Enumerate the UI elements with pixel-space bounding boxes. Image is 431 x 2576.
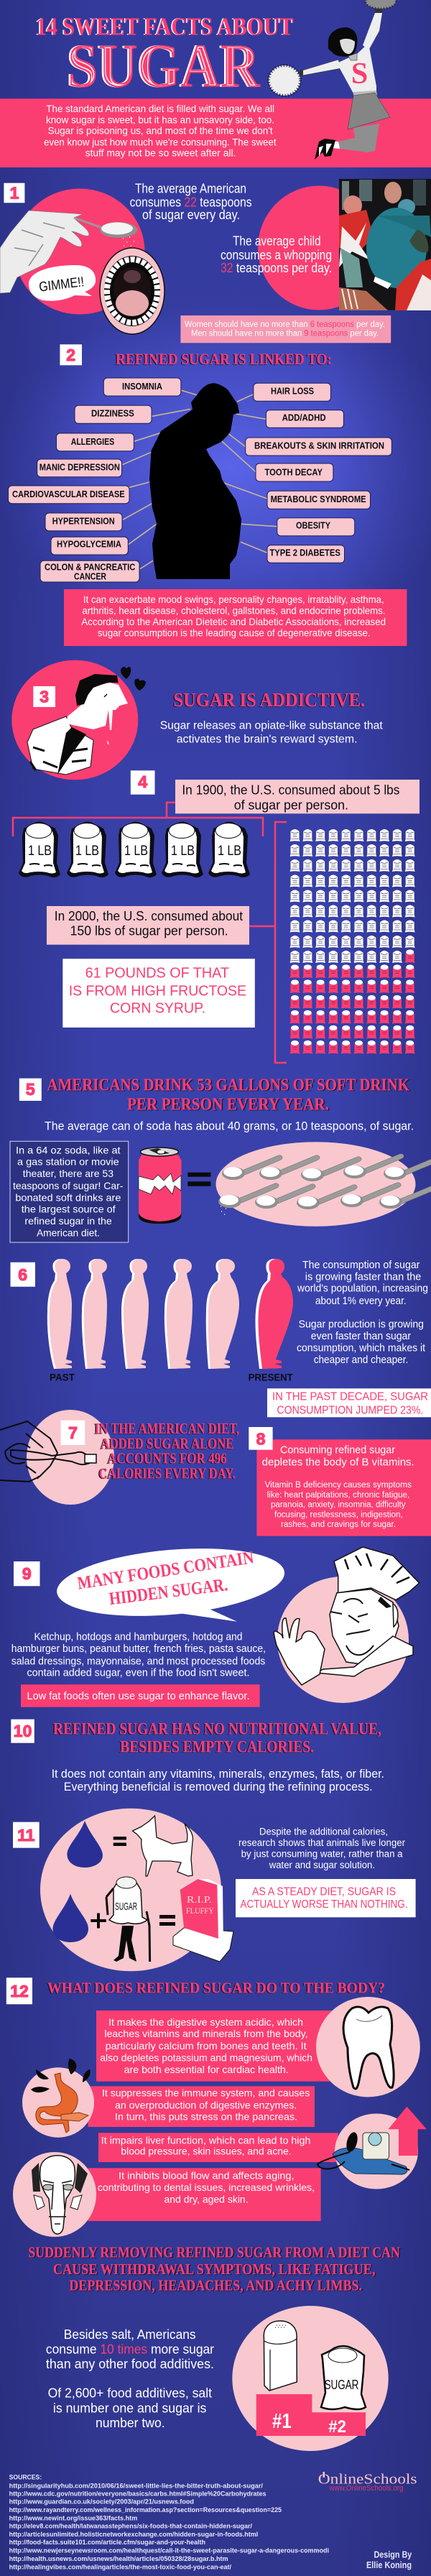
label: hypoglycemia	[51, 537, 128, 555]
text: rashes, and cravings for sugar.	[281, 1520, 396, 1529]
badge 8: 8	[256, 1430, 266, 1449]
heading	[53, 1719, 381, 1755]
icon: soda can	[139, 1148, 182, 1224]
equals sign	[187, 1173, 210, 1186]
speech bubble: hidden sugar: HIDDEN SUGAR.	[108, 1575, 228, 1609]
panel: fact 3	[11, 660, 383, 780]
icon: cheerleader: S	[351, 57, 368, 91]
icon: stomach	[22, 2059, 94, 2138]
text: The average can of soda has about 40 grams, or 10 teaspoons, of sugar.	[45, 1119, 414, 1132]
podium	[256, 2394, 366, 2437]
icon: walking sugar bag	[106, 1877, 150, 1962]
five large sugar bags: 1 LB	[124, 844, 148, 859]
callout: degenerative disease: It can exacerbate mood swings, personality changes, irratablity, asthma,	[83, 594, 384, 605]
block: immune system: It suppresses the immune system, and causes	[102, 2087, 310, 2098]
heading: WHAT DOES REFINED SUGAR DO TO THE BODY?	[47, 1979, 385, 1996]
label: add/adhd: ADD/ADHD	[282, 413, 326, 423]
text: like: heart palpitations, chronic fatigue,	[267, 1491, 409, 1500]
text: average child: The average child	[233, 234, 321, 249]
text	[238, 1826, 405, 1870]
badge 1: 1	[10, 184, 19, 203]
label: cardiovascular disease: CARDIOVASCULAR DISEASE	[12, 489, 125, 499]
callout: low fat	[21, 1684, 260, 1707]
five large sugar bags: 1 LB	[28, 844, 52, 859]
badge 5	[19, 1079, 42, 1101]
text: paranoia, anxiety, insomnia, difficulty	[271, 1501, 406, 1510]
panel: fact 2	[9, 344, 407, 646]
block: blood flow and aging: It inhibits blood flow and affects aging,	[119, 2170, 295, 2182]
badge 1	[4, 183, 24, 203]
callout: daily limits: Men should have no more than 9 teaspoons per day.	[191, 330, 379, 338]
icon: water drop	[53, 1894, 88, 1942]
label: hypertension: HYPERTENSION	[52, 517, 115, 527]
callout: high fructose corn syrup: 61 POUNDS OF THAT	[85, 965, 229, 982]
heading: ACCOUNTS FOR 496	[108, 1450, 227, 1467]
block: immune system	[88, 2086, 315, 2127]
pink box	[256, 1439, 431, 1536]
icon: water drop	[67, 1821, 103, 1868]
callout: daily limits: Women should have no more than 6 teaspoons per day.	[185, 320, 385, 329]
panel: fact 11	[13, 1809, 416, 1971]
block: liver function: blood pressure, skin issues, and acne.	[121, 2145, 292, 2156]
sources: http://www.newint.org/issue363/facts.htm	[9, 2514, 137, 2522]
label: allergies	[56, 433, 134, 451]
block: acidic: particularly calcium from bones and teeth. It	[106, 2040, 307, 2051]
icon: cheerleader	[269, 0, 396, 160]
text: cheaper and cheaper.	[314, 1354, 408, 1366]
badge 6: 6	[18, 1265, 27, 1284]
badge 5: 5	[26, 1080, 35, 1099]
speech bubble: GIMME: GIMME!!	[38, 274, 85, 295]
title	[36, 13, 294, 101]
plus	[91, 1913, 106, 1929]
icon: addicted man	[27, 674, 128, 775]
badge 11	[13, 1822, 40, 1848]
badge 10: 10	[14, 1722, 32, 1740]
label: hypertension	[45, 513, 122, 531]
panel: fact 8	[249, 1427, 431, 1536]
text: activates the brain's reward system.	[177, 733, 358, 745]
badge 12	[6, 1977, 32, 2004]
five large sugar bags: 1 LB	[75, 844, 99, 859]
bracket: 2000	[249, 822, 287, 1063]
text: besides salt: than any other food additives.	[46, 2357, 214, 2371]
text: focusing, restlessness, indigestion,	[274, 1510, 403, 1519]
label: dizziness: DIZZINESS	[91, 408, 134, 418]
callout: 64 oz soda	[10, 1141, 129, 1242]
label: allergies: ALLERGIES	[71, 437, 114, 447]
panel: fact 4	[13, 770, 420, 1063]
callout: daily limits	[180, 315, 391, 343]
block: blood flow and aging: contributing to dental issues, increased wrinkles,	[98, 2182, 315, 2193]
heading: IN THE AMERICAN DIET,	[95, 1420, 239, 1437]
sources: SOURCES:	[9, 2474, 42, 2482]
callout: 64 oz soda: the largest source of	[22, 1204, 116, 1215]
label: add/adhd	[266, 410, 343, 428]
badge 7	[61, 1421, 85, 1445]
callout: 64 oz soda: teaspoons of sugar! Car-	[13, 1180, 124, 1191]
icon: hand with spoon	[0, 211, 137, 293]
text: average child	[221, 234, 332, 275]
label: obesity: OBESITY	[296, 521, 331, 531]
five large sugar bags: 1 LB	[171, 844, 195, 859]
icon: sugar bag	[321, 2346, 366, 2409]
callout: degenerative disease: According to the American Dietetic and Diabetic Associations, increased	[81, 616, 386, 627]
text: food additives: Of 2,600+ food additives, salt	[48, 2386, 212, 2401]
text: by just consuming water, rather than a	[241, 1848, 403, 1859]
logo: OnlineSchools: www.OnlineSchools.org	[329, 2484, 403, 2493]
icon: blood pressure cuff and arrow	[318, 2107, 427, 2189]
callout: degenerative disease	[64, 589, 407, 646]
callout: high fructose corn syrup: CORN SYRUP.	[110, 1000, 205, 1016]
credit: designer: Design By	[374, 2549, 412, 2559]
text: besides salt: Besides salt, Americans	[64, 2327, 195, 2342]
sources: http://www.newjerseynewsroom.com/healthquest/call-it-the-sweet-parasite-sugar-a-dangerous-commodi	[9, 2547, 329, 2554]
icon: tooth	[316, 1997, 420, 2097]
icon: sugar bag: SUGAR	[325, 2378, 358, 2392]
text: contain added sugar, even if the food isn't sweet.	[27, 1668, 250, 1679]
intro text: Sugar is poisoning us, and most of the time we don't	[48, 125, 273, 137]
label: hair loss: HAIR LOSS	[271, 387, 314, 397]
text	[297, 1260, 428, 1366]
icon: walking sugar bag: SUGAR	[115, 1901, 137, 1913]
block: immune system: an overproduction of digestive enzymes.	[115, 2099, 297, 2110]
label: hypoglycemia: HYPOGLYCEMIA	[57, 539, 121, 549]
icon: hearts	[121, 667, 146, 691]
pale circle	[27, 1410, 114, 1505]
callout: 64 oz soda: a gas station or movie	[17, 1156, 119, 1168]
heading: withdrawal symptoms: CAUSE WITHDRAWAL SYMPTOMS, LIKE FATIGUE,	[53, 2261, 375, 2278]
label: dizziness	[75, 405, 152, 423]
label: type 2 diabetes	[267, 545, 345, 563]
block: acidic: are both essential for cardiac health.	[124, 2064, 289, 2075]
title: 14 SWEET FACTS ABOUT	[36, 13, 294, 40]
text: Despite the additional calories,	[259, 1826, 388, 1837]
logo: OnlineSchools: OnlineSchools	[318, 2472, 417, 2488]
panel: fact 12	[6, 1977, 427, 2237]
callout: degenerative disease: arthritis, heart disease, cholesterol, gallstones, and endocrine problems.	[82, 604, 386, 616]
block: liver function: It impairs liver function, which can lead to high	[101, 2134, 310, 2146]
badge 9: 9	[22, 1564, 32, 1583]
intro text: The standard American diet is filled with sugar. We all	[46, 103, 274, 114]
label: colon and pancreatic cancer	[40, 560, 139, 582]
label: colon and pancreatic cancer: CANCER	[74, 572, 106, 582]
intro text	[44, 103, 277, 158]
icon: salt shaker	[264, 2321, 297, 2391]
callout: 64 oz soda: theater, there are 53	[23, 1168, 113, 1179]
block: blood flow and aging	[88, 2168, 321, 2221]
title: SUGAR	[68, 30, 261, 101]
text: besides salt: consume 10 times more sugar	[46, 2342, 214, 2356]
callout: 64 oz soda: bonated soft drinks are	[15, 1191, 121, 1203]
label: past: PAST	[50, 1372, 75, 1383]
callout: degenerative disease: sugar consumption is the leading cause of degenerative disease.	[98, 627, 371, 638]
label: breakouts	[246, 438, 391, 456]
speech bubble: GIMME	[29, 265, 96, 301]
label: tooth decay: TOOTH DECAY	[264, 467, 323, 477]
label: hair loss	[254, 383, 330, 401]
badge 9	[14, 1561, 40, 1586]
callout: 1900	[175, 780, 420, 813]
text: Vitamin B deficiency causes symptoms	[264, 1481, 412, 1490]
heading: SUGAR IS ADDICTIVE.	[174, 689, 365, 711]
badge 3: 3	[40, 687, 49, 706]
block: liver function	[98, 2133, 338, 2162]
label: obesity	[277, 518, 355, 536]
heading	[47, 1076, 409, 1114]
equals	[159, 1915, 175, 1926]
speech bubble: hidden sugar: MANY FOODS CONTAIN	[76, 1548, 255, 1594]
label: breakouts: BREAKOUTS & SKIN IRRITATION	[254, 440, 384, 451]
callout: 1900: In 1900, the U.S. consumed about 5 lbs	[182, 783, 399, 798]
badge 2	[60, 344, 82, 365]
heading: withdrawal symptoms	[28, 2244, 400, 2294]
heading: REFINED SUGAR HAS NO NUTRITIONAL VALUE,	[53, 1719, 381, 1737]
badge 3	[33, 686, 55, 707]
text: Sugar releases an opiate-like substance that	[160, 719, 383, 731]
intro text: even know just how much we're consuming. The sweet	[44, 136, 277, 147]
text: depletes the body of B vitamins.	[262, 1456, 414, 1468]
badge 4	[131, 770, 155, 795]
callout: high fructose corn syrup: IS FROM HIGH FRUCTOSE	[69, 982, 246, 999]
text: average child: 32 teaspoons per day.	[221, 261, 332, 275]
label: type 2 diabetes: TYPE 2 DIABETES	[269, 548, 340, 558]
panel: fact 5	[10, 1076, 431, 1242]
heading	[95, 1420, 239, 1482]
sources: http://articlesunlimited.holisticnetworkexchange.com/hidden-sugar-in-foods.html	[9, 2531, 258, 2539]
grid of 150 small sugar bags	[290, 829, 415, 1053]
text: The consumption of sugar	[302, 1260, 420, 1271]
circle right	[258, 185, 380, 310]
text: average American: consumes 22 teaspoons	[130, 195, 252, 209]
callout: 64 oz soda: American diet.	[37, 1227, 100, 1238]
panel: fact 10	[11, 1719, 384, 1793]
icon: hand holding bottle	[0, 1421, 96, 1482]
five large sugar bags: 1 LB	[218, 844, 241, 859]
badge 7: 7	[68, 1423, 78, 1442]
text: salad dressings, mayonnaise, and most processed foods	[11, 1656, 265, 1667]
badge 2: 2	[66, 346, 75, 364]
text: Everything beneficial is removed during the refining process.	[64, 1781, 373, 1793]
text: hamburger buns, peanut butter, french fries, pasta sauce,	[11, 1643, 266, 1655]
badge 11: 11	[17, 1826, 35, 1845]
panel: intro band	[0, 98, 431, 167]
panel: fact 1	[0, 179, 431, 343]
callout: worse than nothing: AS A STEADY DIET, SUGAR IS	[252, 1885, 396, 1898]
circle left	[14, 188, 145, 315]
panel: fact 7	[0, 1410, 239, 1505]
text: about 1% every year.	[315, 1296, 407, 1307]
text: Ketchup, hotdogs and hamburgers, hotdog and	[34, 1632, 243, 1643]
panel: salt and sugar	[46, 2306, 389, 2451]
figures growing from past to present	[47, 1259, 293, 1369]
badge 6	[10, 1262, 35, 1287]
pink circle	[11, 660, 138, 780]
credit: designer	[366, 2549, 412, 2570]
heading: ADDED SUGAR ALONE	[101, 1435, 233, 1452]
callout: 64 oz soda: In a 64 oz soda, like at	[16, 1144, 121, 1155]
silhouette: overweight body	[149, 383, 241, 579]
label: manic depression: MANIC DEPRESSION	[40, 462, 120, 472]
text	[262, 1444, 414, 1529]
text: average child: consumes a whopping	[221, 248, 332, 262]
speech bubble: hidden sugar	[54, 1540, 287, 1625]
ellipse with ten teaspoons	[216, 1142, 431, 1227]
callout: 2000	[47, 906, 249, 945]
label: insomnia: INSOMNIA	[122, 382, 162, 392]
sources: http://www.guardian.co.uk/society/2003/apr/21/usnews.food	[9, 2498, 194, 2506]
label: tooth decay	[256, 463, 333, 481]
sources: http://www.rayandterry.com/wellness_information.asp?section=Resources&question=225	[9, 2506, 282, 2514]
icon: old man	[13, 2152, 96, 2237]
text: research shows that animals live longer	[238, 1837, 405, 1848]
bracket: 1900	[13, 803, 263, 836]
text: besides salt	[46, 2327, 214, 2371]
heading: PER PERSON EVERY YEAR.	[127, 1095, 329, 1114]
pale circle	[232, 2306, 389, 2451]
logo: OnlineSchools	[318, 2472, 417, 2493]
badge 10	[11, 1719, 34, 1743]
five large sugar bags	[19, 822, 250, 877]
sources: http://elev8.com/health/latwanasstephens/six-foods-that-contain-hidden-sugar/	[9, 2523, 252, 2531]
badge 4: 4	[138, 772, 147, 791]
callout: past decade	[267, 1388, 431, 1417]
text: is growing faster than the	[305, 1272, 421, 1283]
sources	[9, 2474, 329, 2571]
block: acidic: It makes the digestive system acidic, which	[108, 2016, 303, 2028]
callout: worse than nothing: ACTUALLY WORSE THAN NOTHING.	[240, 1898, 408, 1911]
callout: 2000: In 2000, the U.S. consumed about	[55, 909, 243, 923]
connector lines	[122, 390, 277, 569]
block: immune system: In turn, this puts stress on the pancreas.	[115, 2111, 297, 2123]
callout: high fructose corn syrup	[62, 959, 255, 1028]
text: food additives: number two.	[96, 2416, 165, 2430]
panel: fact 9	[11, 1540, 420, 1707]
heading: withdrawal symptoms: DEPRESSION, HEADACHES, AND ACHY LIMBS.	[69, 2276, 362, 2294]
photo	[339, 179, 431, 310]
label: present: PRESENT	[249, 1372, 293, 1383]
label: cardiovascular disease	[9, 486, 129, 504]
badge 8	[249, 1427, 273, 1450]
label: insomnia	[103, 378, 181, 396]
sources: http://healingvibes.com/healingarticles/the-most-toxic-food-you-can-eat/	[9, 2563, 231, 2571]
callout: 64 oz soda: refined sugar in the	[24, 1215, 112, 1227]
label: colon and pancreatic cancer: COLON & PANCREATIC	[45, 562, 135, 572]
text: food additives	[48, 2386, 212, 2430]
icon: healthy dog	[132, 1816, 193, 1876]
text: Sugar production is growing	[299, 1319, 424, 1331]
callout: 2000: 150 lbs of sugar per person.	[70, 924, 228, 938]
heading: CALORIES EVERY DAY.	[99, 1464, 236, 1482]
text: It does not contain any vitamins, minerals, enzymes, fats, or fiber.	[52, 1768, 384, 1781]
text: Consuming refined sugar	[280, 1444, 395, 1456]
callout: 1900: of sugar per person.	[234, 798, 348, 813]
block: acidic: also depletes potassium and magnesium, which	[100, 2052, 312, 2064]
panel: fact 6	[10, 1259, 431, 1417]
text: average American: of sugar every day.	[142, 208, 240, 222]
badge 12: 12	[10, 1982, 29, 2000]
icon: open mouth	[100, 248, 164, 334]
sources: http://www.cdc.gov/nutrition/everyone/basics/carbs.html#Simple%20Carbohydrates	[9, 2490, 266, 2498]
icon: gravestone: R.I.P.	[187, 1895, 212, 1906]
block: acidic: leaches vitamins and minerals from the body,	[104, 2028, 308, 2039]
sources: http://singularityhub.com/2010/06/16/sweet-little-lies-the-bitter-truth-about-sugar/	[9, 2482, 263, 2490]
text: food additives: is number one and sugar is	[53, 2401, 206, 2416]
sources: http://food-facts.suite101.com/article.cfm/sugar-and-your-health	[9, 2539, 205, 2547]
icon: chef	[274, 1547, 420, 1703]
text	[160, 719, 383, 745]
pale circle	[40, 1809, 221, 1971]
intro text: know sugar is sweet, but it has an unsavory side, too.	[46, 114, 274, 125]
text	[11, 1632, 266, 1679]
callout: worse than nothing	[236, 1879, 416, 1917]
icon: gravestone: FLUFFY	[186, 1906, 214, 1916]
block: blood flow and aging: and dry, aged skin.	[164, 2193, 249, 2205]
credit: designer: Ellie Koning	[366, 2560, 412, 2570]
label: manic depression	[37, 459, 122, 477]
text	[52, 1768, 384, 1793]
text: water and sugar solution.	[269, 1860, 375, 1870]
heading: REFINED SUGAR IS LINKED TO:	[116, 350, 332, 368]
text: consumption, which makes it	[297, 1342, 425, 1354]
intro text: stuff may not be so sweet after all.	[85, 147, 236, 158]
podium: #2	[328, 2417, 346, 2437]
callout: low fat: Low fat foods often use sugar to enhance flavor.	[27, 1690, 250, 1702]
text: even faster than sugar	[311, 1331, 411, 1342]
block: acidic	[96, 2011, 334, 2082]
icon: gravestone	[173, 1879, 233, 1962]
text: average American	[130, 181, 252, 222]
label: metabolic syndrome: METABOLIC SYNDROME	[271, 494, 366, 504]
heading: BESIDES EMPTY CALORIES.	[120, 1737, 314, 1755]
label: metabolic syndrome	[267, 491, 371, 509]
sources: http://health.usnews.com/usnews/health/articles/050328/28sugar.b.htm	[9, 2555, 228, 2563]
podium: #1	[272, 2410, 292, 2433]
text: world's population, increasing	[297, 1283, 428, 1295]
text: average American: The average American	[135, 181, 246, 195]
equals	[113, 1837, 126, 1846]
